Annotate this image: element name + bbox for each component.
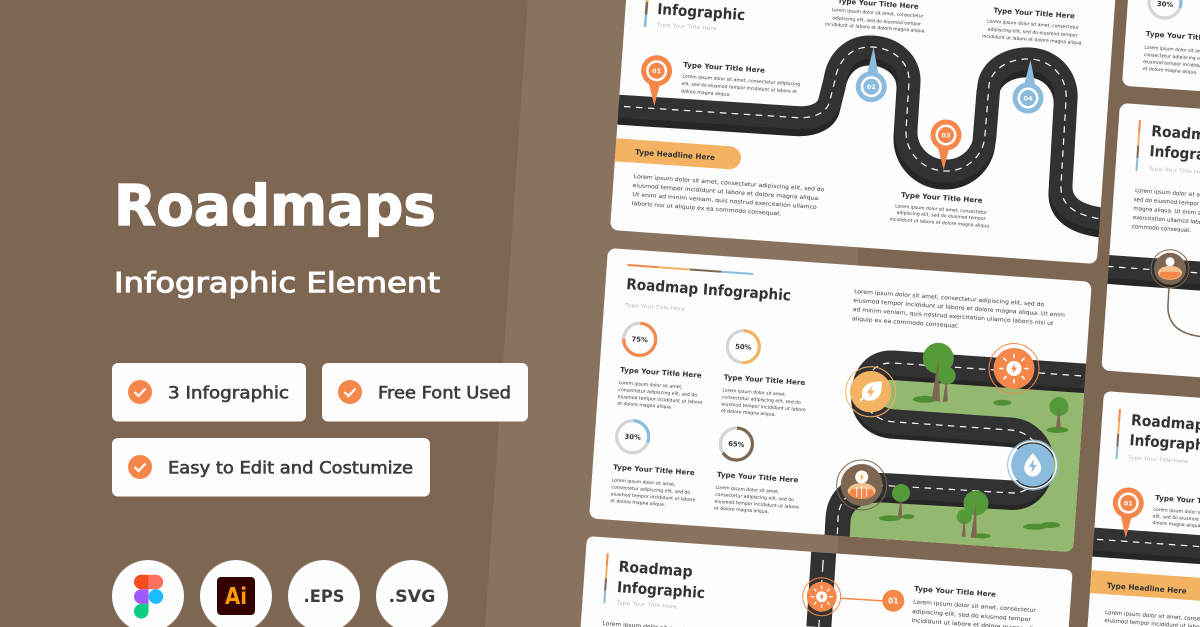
icon: person energy: [837, 460, 887, 510]
road: [1095, 266, 1200, 280]
subheading: Type Your Title Here: [624, 302, 685, 313]
icon: EPS: .EPS: [304, 587, 344, 607]
accent bar: [1116, 409, 1120, 459]
stat 30%: et dolore magna aliqua.: [610, 498, 665, 508]
stat 65%: 65%: [728, 440, 745, 449]
subheading: Type Your Title Here: [1147, 166, 1200, 176]
stat 50%: [721, 330, 806, 418]
stat 30%: [1149, 0, 1181, 18]
stat 65%: eiusmod tempor incididunt ut labore: [714, 499, 799, 511]
accent bar: [1136, 120, 1140, 171]
paragraph: Lorem ipsum dolor sit amet, consectetur adipiscing elit, sed do: [634, 174, 825, 193]
text block: et dolore magna aliqua.: [1143, 66, 1198, 76]
road: [1085, 538, 1200, 554]
feature badge: 3 Infographic: 3 Infographic: [168, 384, 289, 402]
text block 01: Lorem ipsum dolor sit amet, consectetur adipiscing: [682, 74, 800, 88]
number badge 01: [882, 590, 904, 612]
headline pill: Type Headline Here: [635, 148, 715, 162]
text block 04: incididunt ut labore et dolore magna aliqua.: [982, 33, 1083, 47]
stat label: 30%: [1157, 0, 1174, 9]
stat 50%: et dolore magna aliqua.: [721, 408, 776, 418]
headline pill: [614, 138, 741, 170]
stat 50%: consectetur adipiscing elit, sed do: [722, 394, 801, 406]
panel: right middle partial: [1102, 104, 1200, 378]
text block 02: Lorem ipsum dolor sit amet, consectetur: [831, 7, 924, 20]
heading: Roadmap: [618, 558, 693, 581]
panel: right lower partial: [1078, 392, 1200, 627]
stat 65%: et dolore magna aliqua.: [714, 505, 769, 515]
paragraph: laboris nisi ut aliquip ex ea commodo consequat.: [632, 201, 782, 217]
stat 75%: consectetur adipiscing elit, sed do: [618, 387, 698, 399]
stat 30% arc: [1148, 0, 1182, 19]
icon: Adobe Illustrator: Ai: [225, 584, 247, 610]
stat 75%: eiusmod tempor incididunt ut labore: [618, 394, 703, 406]
accent line: [627, 265, 753, 274]
stat 50%: eiusmod tempor incididunt ut labore: [721, 401, 806, 413]
stat 30%: 30%: [624, 433, 641, 442]
stat 75%: Lorem ipsum dolor sit amet,: [619, 380, 683, 390]
text block: adipiscing elit, sed do eiusmod tempor: [912, 609, 1032, 623]
connector: [841, 598, 885, 601]
text block: Type Your Title Here: [914, 585, 996, 599]
pin 01: 01: [652, 67, 662, 75]
text block 02: [825, 0, 926, 35]
feature badge: Free Font Used: [322, 363, 528, 422]
number badge 01: 01: [888, 596, 899, 606]
map illustration with road: [824, 342, 1086, 552]
heading: Infographic: [617, 578, 706, 602]
heading: [617, 558, 706, 602]
stat 50%: Type Your Title Here: [723, 373, 806, 387]
accent bar: [604, 553, 608, 603]
subheading: Type Your Title Here: [615, 600, 677, 610]
feature badge: 3 Infographic: [112, 363, 306, 422]
heading: Roadmap Infographic: [626, 275, 792, 305]
heading: [1129, 411, 1200, 455]
text block: dolore magna aliqua.: [1152, 520, 1200, 529]
stat 65%: [714, 427, 799, 515]
paragraph: eiusmod tempor incididunt ut labore et dolore magna aliqua.: [632, 183, 821, 202]
icon: water drop energy: [1008, 440, 1058, 490]
icon: sun node: [803, 578, 841, 616]
stat 75%: Type Your Title Here: [620, 366, 702, 380]
pin 04: 04: [1023, 94, 1033, 102]
panel: donut stats and road map: [589, 248, 1105, 575]
subtitle: Infographic Element: [114, 267, 440, 299]
stat 65%: Type Your Title Here: [717, 471, 799, 484]
paragraph: [1132, 188, 1200, 234]
stat 30%: consectetur adipiscing elit, sed do: [611, 484, 691, 496]
text block 03: Type Your Title Here: [901, 191, 983, 205]
stat 30%: Type Your Title Here: [613, 463, 695, 477]
icon: SVG: .SVG: [388, 587, 436, 607]
icon: EPS: [288, 560, 360, 627]
background lighter diagonal band: [485, 0, 876, 627]
accent bar: [645, 0, 648, 27]
text block: [1152, 494, 1200, 529]
stat 30%: [610, 420, 696, 508]
feature badge: Easy to Edit: Easy to Edit and Costumize: [168, 458, 413, 478]
feature badge: Easy to Edit: [112, 438, 430, 496]
pin 02: 02: [867, 83, 876, 91]
text block 01: elit, sed do eiusmod tempor incididunt ut labore et: [681, 81, 797, 95]
main title: Roadmaps: [114, 174, 436, 239]
text block 01: [681, 61, 800, 98]
paragraph: commodo consequat.: [1132, 224, 1192, 234]
icon: SVG: [376, 560, 448, 627]
road: [599, 47, 1110, 227]
paragraph: eiusmod tempor incididunt ut labore et dolore magna aliqua. Ut enim: [853, 298, 1065, 319]
headline band: [1090, 570, 1200, 601]
icon: sun energy: [989, 344, 1039, 394]
stat 75%: 75%: [631, 335, 648, 344]
text block 04: Lorem ipsum dolor sit amet, consectetur: [987, 19, 1079, 31]
text block 03: incididunt ut labore et dolore magna aliqua.: [889, 216, 991, 230]
icon: leaf energy: [846, 367, 896, 417]
panel: vertical road timeline: [581, 537, 1072, 627]
bushes: [879, 396, 1068, 538]
text block 04: Type Your Title Here: [993, 7, 1075, 20]
text block: [1143, 30, 1200, 76]
heading: [1149, 122, 1200, 166]
text block: Lorem ipsum dolor sit amet, consectetur: [913, 600, 1037, 614]
subheading: Type Your Title Here: [655, 22, 717, 32]
pin 01: [1113, 488, 1144, 538]
subheading: Type Your Title Here: [1127, 455, 1188, 465]
stat 65%: consectetur adipiscing elit, sed do: [715, 492, 794, 503]
stat 30%: eiusmod tempor incididunt ut labore: [611, 491, 696, 503]
pin 03: [930, 120, 962, 170]
text block 02: adipiscing elit, sed do eiusmod tempor: [832, 15, 921, 28]
stat 65%: Lorem ipsum dolor sit amet,: [715, 485, 780, 495]
pin 03: 03: [941, 131, 951, 139]
paragraph: aliquip ex ea commodo consequat.: [852, 316, 960, 330]
road: [819, 540, 824, 627]
paragraph: [632, 174, 825, 217]
text block 01: dolore magna aliqua.: [681, 89, 731, 98]
pin 01: 01: [1124, 499, 1133, 507]
text block 01: Type Your Title Here: [683, 61, 765, 75]
pin 04: [1012, 60, 1044, 114]
heading: Infographic: [657, 0, 746, 24]
text block 02: incididunt ut labore et dolore magna aliqua.: [825, 21, 926, 35]
text block 03: [889, 191, 991, 230]
trees: [892, 343, 1068, 538]
panel: winding road roadmap: [598, 0, 1118, 264]
headline band: Type Headline Here: [1107, 581, 1187, 596]
text block 04: [982, 7, 1083, 47]
paragraph: Ut enim ad minim veniam, quis nostrud exercitation ullamco: [632, 192, 818, 211]
paragraph: Lorem ipsum dolor sit amet, consectetur adipiscing elit, sed do: [854, 289, 1045, 308]
icon: Figma: [112, 560, 184, 627]
stat 30%: Lorem ipsum dolor sit amet,: [612, 477, 676, 488]
text block: [911, 585, 1044, 627]
pin 02: [856, 47, 887, 102]
panel: right top partial: [1122, 0, 1200, 107]
icon: Adobe Illustrator: [200, 560, 272, 627]
stat 50%: Lorem ipsum dolor sit amet,: [722, 387, 787, 398]
feature badge: Free Font Used: Free Font Used: [378, 384, 511, 402]
pin 01: [641, 55, 672, 106]
stat 75%: et dolore magna aliqua.: [617, 401, 672, 411]
connector curve: [1168, 287, 1200, 337]
icon: person energy: [1151, 250, 1189, 288]
stat 75%: [617, 322, 703, 411]
text block 04: adipiscing elit, sed do eiusmod tempor: [987, 27, 1078, 39]
text block 03: Lorem ipsum dolor sit amet, consectetur: [895, 204, 987, 216]
paragraph: [852, 289, 1065, 330]
paragraph: ad minim veniam, quis nostrud exercitation ullamco laboris nisi ut: [853, 307, 1054, 327]
stat 50%: 50%: [735, 343, 752, 352]
text block 03: adipiscing elit, sed do eiusmod tempor: [896, 210, 986, 222]
